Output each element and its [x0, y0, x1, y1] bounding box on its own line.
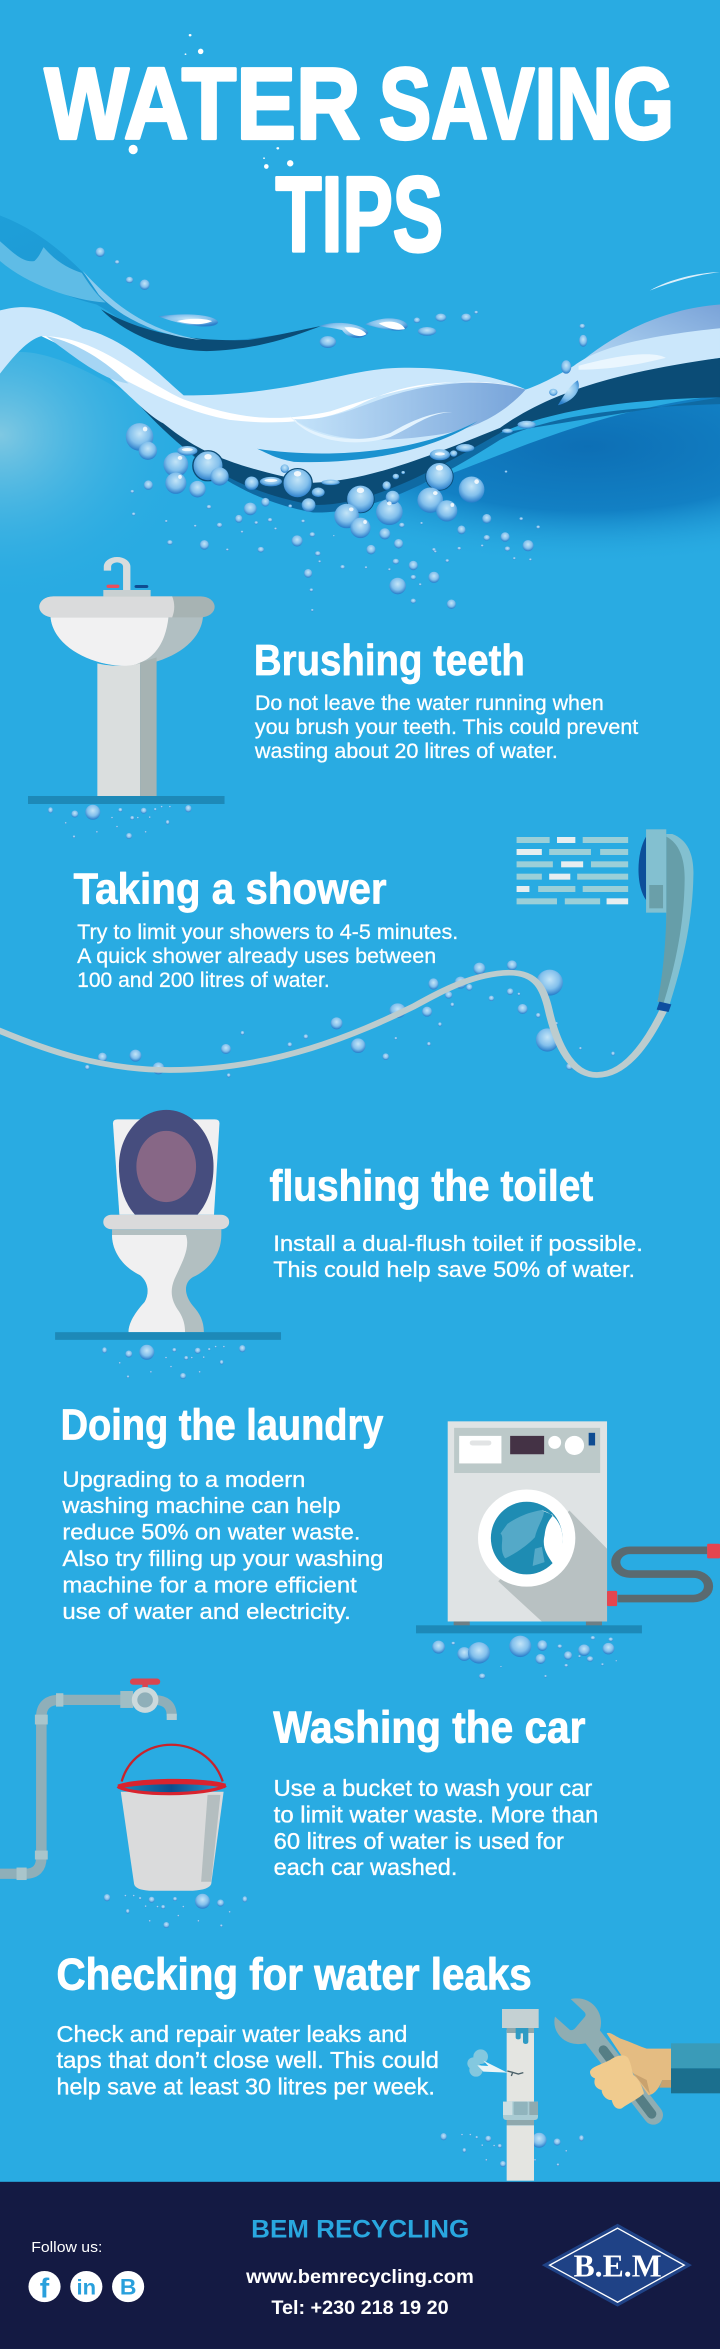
text: doing the laundry: use of water and electricity. [62, 1600, 351, 1624]
text: flushing the toilet [273, 1232, 643, 1283]
heading: brushing teeth: Brushing teeth [254, 636, 525, 685]
drain hose [616, 1550, 709, 1599]
title: water saving tips [45, 34, 674, 274]
text: washing the car: to limit water waste. More than [274, 1802, 598, 1827]
title: water saving tips: WATER [45, 47, 360, 161]
water wave illustration [0, 216, 720, 611]
icon: pipe with tap [0, 1679, 177, 1880]
toilet lid [119, 1110, 214, 1215]
floor shelf: washing machine [416, 1625, 642, 1633]
website: www.bemrecycling.com [245, 2266, 474, 2288]
heading: checking for water leaks: Checking for water leaks [56, 1950, 532, 2000]
light wave body [0, 307, 720, 483]
control panel [454, 1428, 600, 1473]
follow us label: Follow us: [31, 2239, 102, 2256]
social icons: f [40, 2273, 50, 2303]
upper left splash [0, 216, 321, 348]
text: brushing teeth: wasting about 20 litres of water. [254, 740, 558, 763]
feet [454, 1621, 470, 1626]
deep water under the wave [138, 395, 720, 605]
section: leak illustration [467, 1998, 720, 2181]
text: taking a shower: Try to limit your showers to 4-5 minutes. [77, 921, 458, 944]
text: taking a shower: 100 and 200 litres of water. [77, 969, 330, 992]
text: checking for water leaks: taps that don’t close well. This could [56, 2047, 439, 2073]
text: checking for water leaks: Check and repair water leaks and [56, 2021, 407, 2047]
text: washing the car: 60 litres of water is used for [274, 1828, 564, 1854]
text: taking a shower [77, 921, 458, 992]
lower wave shadow [156, 397, 720, 513]
social icons: in [77, 2275, 96, 2300]
water drops under sink [48, 805, 191, 839]
bubbles [126, 421, 540, 611]
icon: sink [39, 560, 215, 796]
splash droplets [96, 248, 587, 405]
water drops under toilet [102, 1345, 245, 1379]
text: doing the laundry [61, 1468, 383, 1624]
door shadow [498, 1511, 607, 1621]
heading: taking a shower: Taking a shower [73, 864, 387, 913]
icon: washing machine [448, 1421, 720, 1626]
text: washing the car: Use a bucket to wash your car [274, 1776, 593, 1801]
text: doing the laundry: washing machine can help [61, 1494, 341, 1519]
floor shelf: toilet [55, 1332, 281, 1340]
white ribbon [41, 336, 526, 422]
water drops under washing machine [432, 1636, 617, 1679]
logo: B.E.M diamond: B.E.M [574, 2249, 662, 2284]
text: flushing the toilet: Install a dual-flush toilet if possible. [273, 1232, 643, 1256]
header section [0, 34, 720, 611]
water drops around leaking pipe [440, 2133, 584, 2167]
section: toilet and laundry [55, 1110, 720, 1679]
section: washing the car [0, 1679, 598, 2099]
icon: hand with wrench [554, 1998, 720, 2115]
text: doing the laundry: reduce 50% on water waste. [62, 1521, 360, 1545]
text: taking a shower: A quick shower already uses between [77, 945, 436, 968]
text: brushing teeth: Do not leave the water running when [255, 692, 604, 715]
bubbles around hose [85, 960, 615, 1077]
bubble highlights [143, 427, 479, 524]
title: water saving tips: TIPS [276, 154, 443, 274]
water spray lines [517, 837, 628, 904]
company name: BEM RECYCLING [251, 2216, 469, 2243]
right white highlight [579, 354, 666, 370]
door [478, 1489, 575, 1587]
text: brushing teeth [254, 692, 638, 763]
text: flushing the toilet: This could help save 50% of water. [273, 1258, 635, 1283]
periwinkle inner fold [294, 383, 526, 440]
footer band [0, 2182, 720, 2349]
floor shelf: sink [28, 796, 225, 804]
text: checking for water leaks [56, 2021, 439, 2099]
section: brushing teeth and shower [0, 560, 693, 1077]
basin [51, 617, 203, 666]
shower hose [0, 973, 664, 1075]
telephone: Tel: +230 218 19 20 [271, 2297, 449, 2319]
text: doing the laundry: machine for a more efficient [62, 1573, 357, 1598]
logo: B.E.M diamond [542, 2224, 692, 2307]
text: doing the laundry: Also try filling up your washing [62, 1547, 383, 1571]
text: washing the car [274, 1776, 598, 1880]
icon: shower head [638, 829, 693, 1012]
icon: leaking pipe [467, 2009, 539, 2181]
text: washing the car: each car washed. [274, 1854, 457, 1880]
leak spray [473, 2049, 488, 2064]
social icons: B [120, 2275, 136, 2300]
water drops under bucket [104, 1894, 247, 1928]
thin streak [650, 272, 720, 291]
dark under band [138, 358, 720, 505]
icon: toilet [103, 1110, 229, 1332]
heading: flushing the toilet: flushing the toilet [270, 1162, 593, 1211]
heading: doing the laundry: Doing the laundry [61, 1401, 383, 1450]
icon: bucket [118, 1745, 226, 1891]
social icons [28, 2271, 144, 2303]
pedestal [97, 663, 140, 796]
text: doing the laundry: Upgrading to a modern [62, 1468, 305, 1492]
heading: washing the car: Washing the car [273, 1703, 585, 1753]
section: footer [0, 2182, 720, 2349]
top right periwinkle crest [576, 304, 720, 366]
faucet [107, 560, 127, 592]
glow left under the wave [0, 352, 230, 593]
blue stripe [257, 421, 478, 462]
text: checking for water leaks: help save at least 30 litres per week. [56, 2074, 435, 2099]
